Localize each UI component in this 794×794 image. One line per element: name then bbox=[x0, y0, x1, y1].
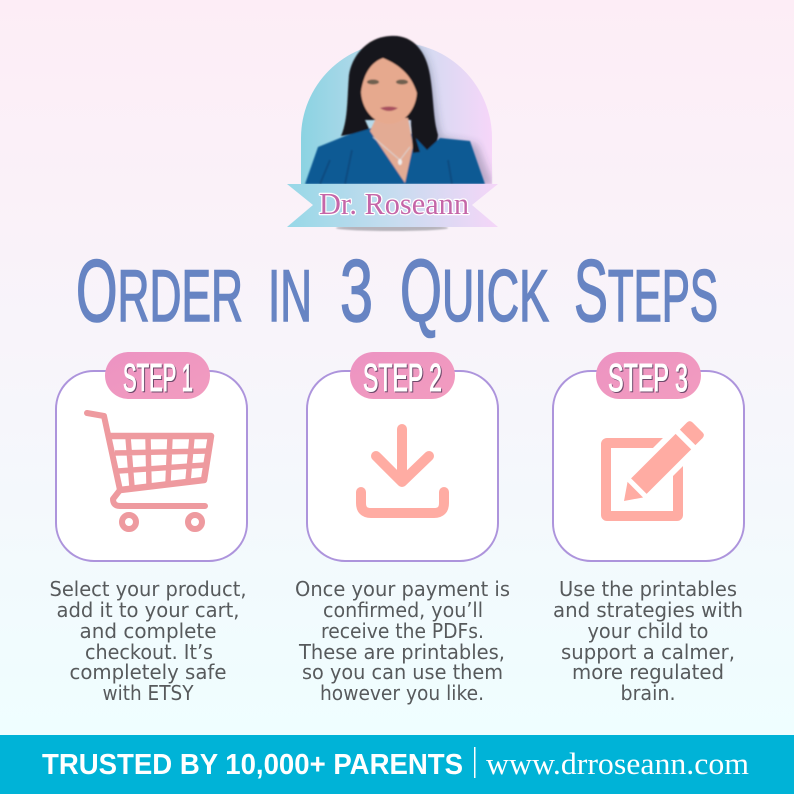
step 2 description: These are printables, bbox=[298, 640, 505, 664]
step 2 description bbox=[295, 577, 510, 705]
step 2 badge: STEP 2 bbox=[363, 357, 442, 400]
step 3 badge bbox=[596, 352, 701, 400]
step 2 description: so you can use them bbox=[302, 660, 503, 684]
trust statement: TRUSTED BY 10,000+ PARENTS bbox=[42, 749, 463, 781]
icon: download bbox=[361, 429, 444, 513]
step 1 description: add it to your cart, bbox=[56, 598, 240, 622]
title: ORDER bbox=[76, 241, 243, 340]
ribbon shadow bbox=[336, 225, 448, 231]
icon: pencil on checkbox bbox=[606, 410, 715, 516]
step 1 description: Select your product, bbox=[50, 577, 246, 601]
step 1 badge: STEP 1 bbox=[123, 357, 193, 400]
step 3 description: brain. bbox=[620, 681, 676, 705]
step 1 badge bbox=[105, 352, 210, 400]
step 2 badge bbox=[350, 352, 455, 400]
step 1 description: and complete bbox=[80, 619, 216, 643]
step 2 description: confirmed, you’ll bbox=[323, 598, 483, 622]
card 1 bbox=[56, 371, 247, 561]
step 2 description: however you like. bbox=[320, 681, 484, 705]
panel: step 3 bbox=[553, 352, 744, 705]
name: Dr. Roseann bbox=[319, 186, 469, 221]
title: STEPS bbox=[574, 241, 718, 340]
card 2 bbox=[307, 371, 498, 561]
card 3 bbox=[553, 371, 744, 561]
step 3 description: Use the printables bbox=[559, 577, 737, 601]
arch backdrop bbox=[301, 42, 492, 184]
portrait badge bbox=[287, 36, 498, 231]
step 3 badge: STEP 3 bbox=[608, 357, 688, 400]
step 1 description: with ETSY bbox=[102, 681, 194, 705]
step 3 description: more regulated bbox=[572, 660, 724, 684]
title bbox=[76, 241, 718, 340]
icon: shopping cart bbox=[87, 413, 211, 529]
title: 3 bbox=[340, 241, 373, 340]
step 2 description: receive the PDFs. bbox=[321, 619, 484, 643]
step 1 description: completely safe bbox=[70, 660, 226, 684]
step 3 description: your child to bbox=[588, 619, 708, 643]
step 1 description bbox=[50, 577, 246, 705]
step 3 description: and strategies with bbox=[553, 598, 743, 622]
title: QUICK bbox=[400, 241, 549, 340]
step 3 description bbox=[553, 577, 743, 705]
step 1 description: checkout. It’s bbox=[85, 640, 213, 664]
panel: step 1 bbox=[50, 352, 247, 705]
panel: step 2 bbox=[295, 352, 510, 705]
portrait of Dr. Roseann bbox=[305, 36, 494, 186]
footer bar bbox=[0, 735, 794, 794]
ribbon bbox=[287, 184, 498, 227]
step 3 description: support a calmer, bbox=[561, 640, 735, 664]
title: IN bbox=[268, 256, 312, 337]
website: www.drroseann.com bbox=[486, 746, 749, 781]
step 2 description: Once your payment is bbox=[295, 577, 510, 601]
